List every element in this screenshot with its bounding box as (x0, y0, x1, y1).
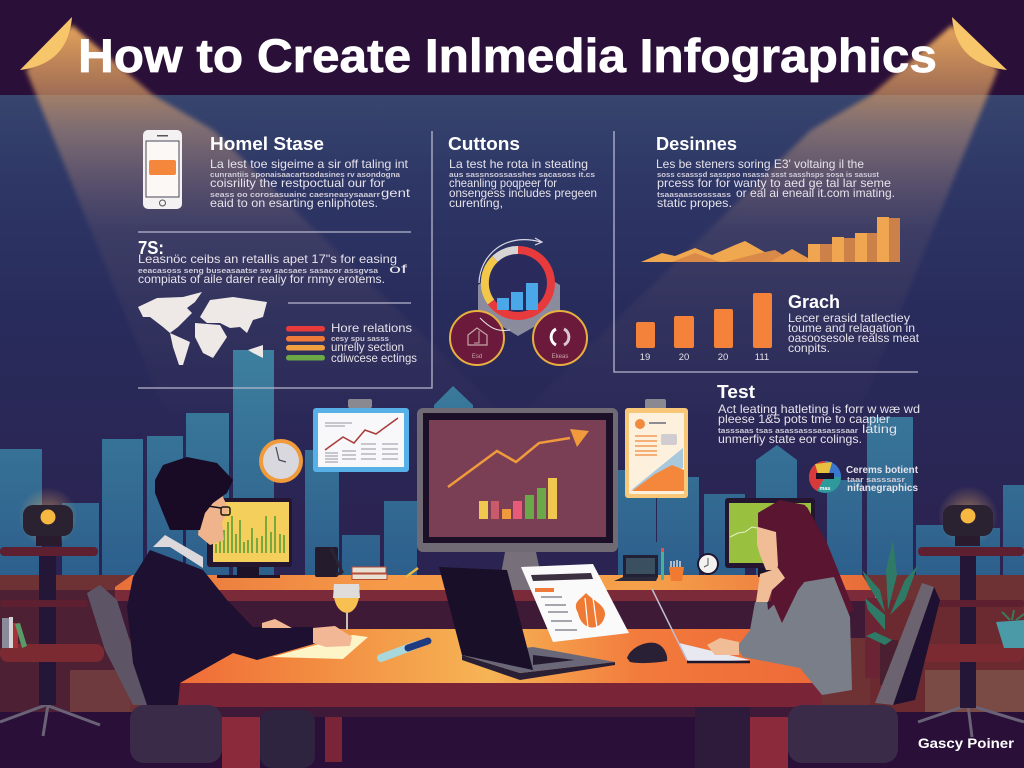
text block: test body: tasssaas tsas asassasssasasssaar (718, 426, 858, 435)
text block: home stage body: cunrantiis sponaisaacartsodasines rv asondogna (210, 170, 401, 179)
side table right (918, 547, 1024, 737)
legend: cdiwcese ectings (331, 351, 417, 365)
credit: Gascy Poiner (918, 736, 1015, 751)
legend: unrelly section (331, 340, 404, 354)
back wall and floor (0, 575, 1024, 768)
stage lamp right (952, 17, 1007, 70)
glasses (208, 506, 230, 515)
text block: grach body: Lecer erasid tatlectiey (788, 311, 910, 325)
text block: test body: unmerfiy state eor colings. (718, 432, 862, 446)
desk props: mug, books, pencil (315, 547, 418, 580)
face (198, 495, 229, 545)
hand on keyboard (707, 638, 739, 655)
collar (153, 535, 203, 568)
books on left shelf (2, 617, 27, 648)
badge: colourful logo and caption (809, 461, 918, 494)
document on desk (521, 564, 629, 642)
stage light left (18, 487, 78, 547)
text block: test body: pleese 1&5 pots tme to caapler (718, 412, 890, 426)
text block: grach body (788, 311, 920, 355)
hands (262, 619, 352, 647)
icon: phone (143, 130, 182, 209)
wine glass (333, 584, 360, 630)
panel: 7S (138, 238, 417, 365)
panel: cuttons (448, 134, 597, 365)
icon: refresh circle (533, 311, 587, 365)
icon: house circle: Esd (472, 354, 482, 360)
main desk (179, 629, 822, 768)
text block: cuttons body: onsengess includes pregeen (449, 186, 597, 200)
woman figure (707, 500, 854, 695)
text block: cuttons body: aus sassnsossasshes sacasoss it.cs (449, 170, 595, 179)
hair back (758, 500, 854, 625)
text block: desinnes body: tsaasaassosssass (657, 190, 731, 199)
clipboard: report (625, 399, 688, 498)
woman's chair (788, 583, 940, 763)
text block: desinnes body: prcess for for wanty to aed ge tal lar seme (657, 176, 891, 190)
wall clock (259, 439, 303, 483)
large plant (862, 540, 918, 685)
panel: desinnes (636, 134, 920, 363)
chart: rising trend line (448, 429, 589, 487)
potted plant on shelf (996, 610, 1024, 648)
spotlight beam left (26, 25, 520, 430)
hair front (758, 500, 830, 623)
sweater (737, 577, 852, 695)
skyline buildings (0, 350, 1024, 579)
mouse (627, 643, 667, 663)
text block: desinnes body: static propes. (657, 196, 732, 210)
title: How to Create Inlmedia Infographics (78, 29, 937, 82)
woman's monitor (725, 498, 815, 577)
text block: test body: Act leating hatleting is forr w wæ wd (718, 402, 920, 416)
heading: Desinnes: Desinnes (656, 134, 737, 154)
notebook under hand (272, 635, 368, 659)
heading: Cuttons: Cuttons (448, 134, 520, 154)
heading: Grach: Grach (788, 292, 840, 312)
text block: desinnes body: soss csasssd sasspso nsassa ssst sasshsps sosa is sasust (657, 170, 880, 179)
heading: Test: Test (717, 382, 755, 402)
big laptop (439, 567, 615, 680)
icon: world map (138, 292, 267, 365)
woman's laptop (652, 589, 750, 663)
chart: orange bar chart: 20 (718, 352, 728, 363)
side table left (0, 547, 104, 736)
badge: colourful logo and caption: Cerems botient (846, 464, 918, 476)
badge: colourful logo and caption: mas (819, 486, 831, 492)
text block: 7S body: of (389, 262, 408, 276)
desk props: small laptop, pencil, cup, alarm clock (614, 548, 719, 581)
legend: Hore relations (331, 321, 412, 335)
icon: house circle (450, 311, 510, 365)
text block: home stage body: La lest toe sigeime a sir off taling int (210, 157, 409, 171)
chart: monitor bars (479, 478, 557, 519)
panel: home stage (143, 130, 411, 210)
chart: orange bar chart: 19 (640, 352, 650, 363)
text block: 7S body: compiats of aile darer realiy for rnmy erotems. (138, 272, 385, 286)
text block: 7S body (138, 252, 408, 286)
panel frame lines (138, 131, 918, 388)
text block: grach body: toume and relagation in (788, 321, 915, 335)
main monitor (417, 408, 618, 590)
text block: desinnes body (656, 157, 895, 210)
header band (0, 0, 1024, 95)
marker pen (381, 641, 428, 658)
text block: desinnes body: Les be steners soring E3' voltaing il the (656, 157, 864, 171)
text block: grach body: conpits. (788, 341, 830, 355)
chart: orange bar chart (636, 293, 772, 363)
icon: refresh circle: Ekeas (552, 354, 568, 360)
heading: Homel Stase: Homel Stase (210, 134, 324, 154)
chart: orange bar chart: 20 (679, 352, 689, 363)
chart: orange bar chart: 111 (755, 352, 769, 363)
man's monitor with chart (207, 498, 292, 578)
panel: test (717, 382, 920, 494)
text block: 7S body: Leasnöc ceibs an retallis apet 17"s for easing (138, 252, 397, 266)
back desk (115, 575, 880, 678)
text block: desinnes body: or eal ai eneail it.com imating. (736, 186, 895, 200)
text block: test body: lating (862, 422, 897, 436)
text block: cuttons body: curenting, (449, 196, 503, 210)
text block: home stage body: gent (381, 186, 411, 200)
man figure (127, 457, 352, 705)
chart: area and stepped bars (641, 217, 900, 262)
man's chair (87, 585, 315, 768)
legend (286, 321, 417, 365)
hand on chin (756, 568, 785, 602)
stage light right (938, 486, 998, 546)
text block: 7S body: eeacasoss seng buseasaatse sw sacsaes sasacor assgvsa (138, 266, 379, 275)
text block: cuttons body (449, 157, 597, 210)
stage lamp left (20, 17, 72, 70)
text block: cuttons body: La test he rota in steating (449, 157, 588, 171)
badge: colourful logo and caption: taar sasssasr (847, 475, 905, 484)
clipboard: line chart (313, 399, 409, 472)
text block: test body (718, 402, 920, 446)
text block: home stage body: eaid to on esarting enliphotes. (210, 196, 378, 210)
torso (127, 550, 317, 705)
chart: donut process cycle (478, 238, 560, 336)
text block: home stage body: seass oo corosasuainc caesneasysaaarr (210, 190, 380, 199)
text block: home stage body: coisrility the restpoctual our for (210, 176, 385, 190)
badge: colourful logo and caption: nifanegraphics (847, 482, 918, 494)
text block: grach body: oasoosesole realss meat (788, 331, 920, 345)
face (757, 518, 780, 570)
spotlight beam right (504, 25, 998, 430)
text block: cuttons body: cheanling poqpeer for (449, 176, 557, 190)
text block: home stage body (210, 157, 411, 210)
hair (155, 457, 233, 530)
woman's legs (695, 707, 750, 768)
legend: cesy spu sasss (331, 334, 389, 343)
heading: 7S: 7S: (138, 238, 164, 258)
